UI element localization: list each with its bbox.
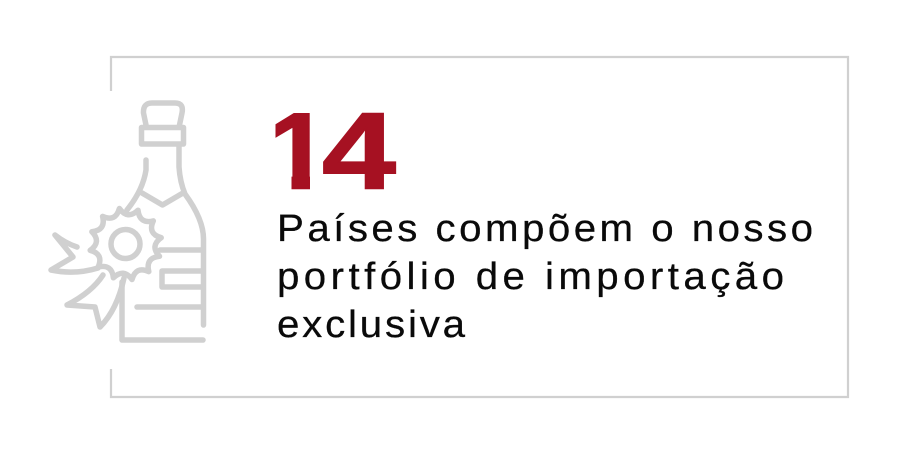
- big number 14: [258, 90, 396, 212]
- description text: [277, 208, 813, 346]
- description text: portfólio de importação: [277, 256, 784, 298]
- panel frame: [111, 57, 848, 397]
- description text: exclusiva: [277, 304, 465, 346]
- big number 14: 4: [322, 90, 396, 212]
- description text: Países compõem o nosso: [277, 208, 813, 250]
- icon: champagne bottle with award rosette: [51, 103, 204, 340]
- big number 14: 1: [266, 90, 330, 212]
